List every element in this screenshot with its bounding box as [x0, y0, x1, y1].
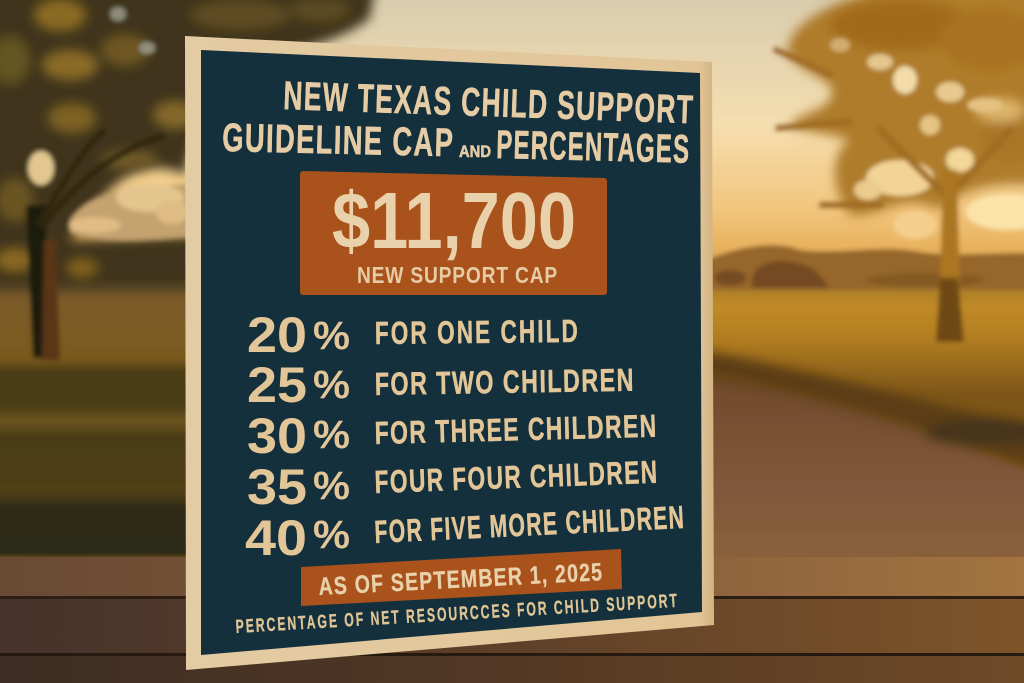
sign navy face: [201, 50, 702, 655]
row: four children: [247, 454, 659, 515]
row: two children: FOR TWO CHILDREN: [375, 362, 635, 402]
effective date banner: AS OF SEPTEMBER 1, 2025: [318, 558, 604, 601]
row: one child: %: [313, 314, 350, 358]
list: percentages by number of children: [245, 307, 686, 566]
row: five children: %: [313, 513, 350, 557]
cap amount: $11,700: [332, 176, 576, 265]
row: two children: [247, 357, 635, 413]
dark verge along road: [700, 350, 1024, 478]
row: one child: 20: [247, 307, 307, 363]
title: GUIDELINE CAP: [222, 116, 455, 165]
right tree: [776, 0, 1024, 342]
panel: sign board: [185, 36, 714, 670]
title: [222, 74, 695, 172]
footnote: PERCENTAGE OF NET RESOURCCES FOR CHILD SUPPORT: [235, 591, 680, 638]
row: four children: FOUR FOUR CHILDREN: [374, 454, 659, 500]
distant tree line right: [700, 245, 1024, 290]
row: five children: [245, 499, 686, 566]
callout: support cap: [303, 174, 604, 292]
left tree: [0, 0, 380, 360]
row: one child: FOR ONE CHILD: [375, 313, 580, 351]
row: four children: 35: [247, 459, 307, 515]
row: two children: %: [313, 363, 350, 407]
row: three children: FOR THREE CHILDREN: [374, 408, 658, 451]
row: one child: [247, 307, 580, 363]
row: two children: 25: [247, 357, 307, 413]
row: three children: [247, 408, 658, 464]
wooden table: [0, 557, 1024, 683]
sign cream border: [185, 36, 714, 670]
cap label: NEW SUPPORT CAP: [357, 262, 558, 288]
title: NEW TEXAS CHILD SUPPORT: [283, 74, 695, 132]
title: AND: [459, 142, 491, 161]
row: four children: %: [313, 464, 350, 508]
title: PERCENTAGES: [496, 123, 691, 172]
row: five children: 40: [245, 510, 307, 566]
row: three children: %: [313, 413, 350, 457]
row: five children: FOR FIVE MORE CHILDREN: [374, 499, 686, 550]
row: three children: 30: [247, 408, 307, 464]
road: [700, 374, 1024, 600]
effective date banner: [301, 549, 622, 606]
